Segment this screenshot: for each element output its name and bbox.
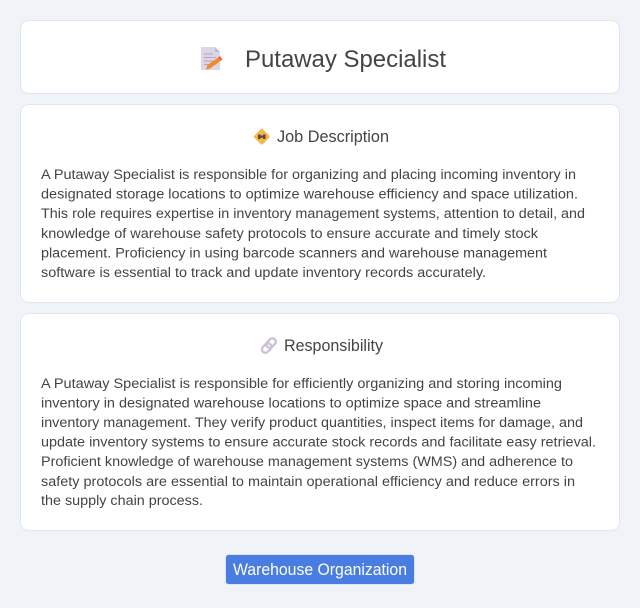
text block: responsibility: inventory in designated warehouse locations to optimize space and streamline: [41, 396, 541, 412]
button: warehouse organization: Warehouse Organization: [233, 561, 407, 579]
button: warehouse organization: [226, 554, 414, 584]
text block: responsibility: safety protocols are essential to maintain operational efficiency and reduce errors in: [41, 474, 575, 490]
text block: responsibility: [41, 376, 596, 509]
heading: job description: Job Description: [277, 128, 389, 146]
text block: job description: A Putaway Specialist is responsible for organizing and placing incoming inventory in: [41, 167, 576, 183]
icon: document with pencil: [201, 47, 222, 70]
panel: job description: [20, 104, 620, 302]
text block: job description: placement. Proficiency in using barcode scanners and warehouse management: [41, 245, 547, 261]
panel: title card: [20, 20, 620, 94]
text block: job description: software is essential to track and update inventory records accurately.: [41, 265, 486, 281]
text block: responsibility: update inventory systems to ensure accurate stock records and facilitate easy retrieval.: [41, 435, 596, 451]
text block: responsibility: Proficient knowledge of warehouse management systems (WMS) and adherence to: [41, 454, 573, 470]
text block: responsibility: A Putaway Specialist is responsible for efficiently organizing and storing incoming: [41, 376, 562, 392]
text block: job description: This role requires expertise in inventory management systems, attention to detail, and: [41, 206, 585, 222]
title: Putaway Specialist: [245, 46, 446, 73]
icon: orange diamond sign: [253, 128, 270, 145]
panel: responsibility: [20, 314, 620, 530]
text block: responsibility: the supply chain process.: [41, 493, 203, 509]
text block: responsibility: inventory management. They verify product quantities, inspect items for damage, and: [41, 415, 583, 431]
text block: job description: [41, 167, 585, 281]
icon: chain link: [261, 337, 277, 354]
text block: job description: knowledge of warehouse safety protocols to ensure accurate and timely stock: [41, 226, 539, 242]
heading: responsibility: Responsibility: [284, 337, 384, 355]
text block: job description: designated storage locations to optimize warehouse efficiency and space utilization.: [41, 187, 578, 203]
